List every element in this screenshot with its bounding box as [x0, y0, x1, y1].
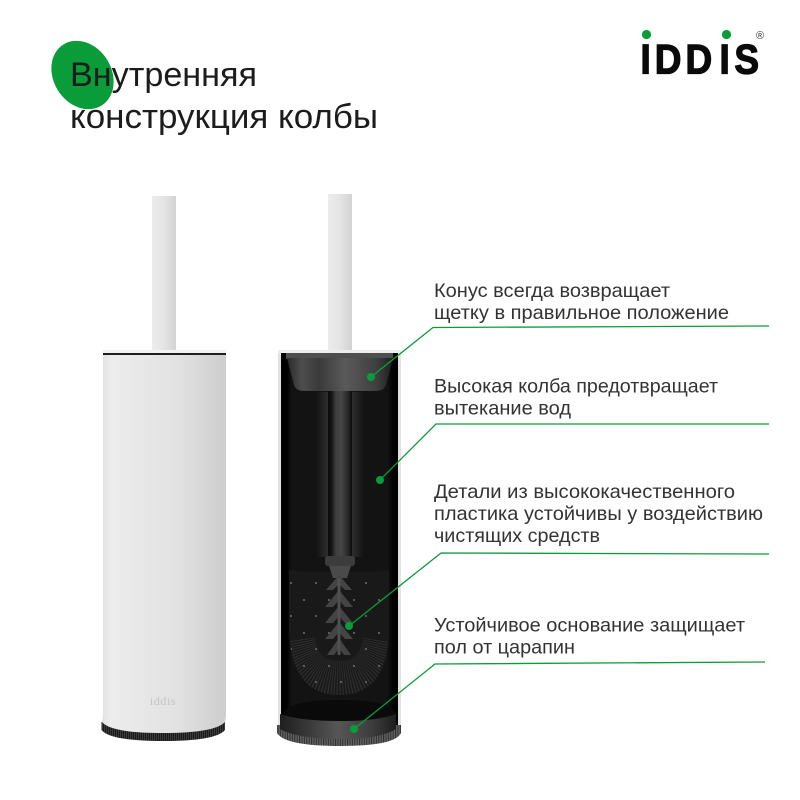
title: конструкция колбы [70, 98, 378, 136]
callout: tall flask [376, 376, 769, 484]
handle [328, 194, 352, 351]
base collar [280, 714, 396, 739]
logo: IDDIS: IDDIS [640, 36, 759, 83]
brush spine [325, 575, 353, 655]
callout: cone: Конус всегда возвращает [434, 280, 670, 302]
callout: stable base [350, 614, 765, 733]
product: cutaway view [277, 194, 401, 746]
callout: cone [367, 280, 769, 381]
base ring [102, 722, 225, 741]
cone [287, 358, 393, 391]
product: closed white brush holder [102, 196, 226, 741]
logo: IDDIS: ® [756, 30, 764, 42]
callout: tall flask: Высокая колба предотвращает [434, 376, 718, 398]
callout: stable base: Устойчивое основание защищает [434, 614, 745, 636]
callout: stable base: пол от царапин [434, 636, 575, 658]
callout: tall flask: вытекание вод [434, 398, 572, 420]
green title accent blob [39, 29, 126, 121]
handle [152, 196, 176, 351]
lid [103, 350, 226, 353]
cone top rim [286, 353, 393, 359]
title [70, 56, 378, 136]
title: Внутренняя [70, 56, 257, 94]
knurled base ring [277, 725, 401, 746]
lid [278, 350, 401, 353]
bristle fringe [298, 640, 380, 678]
base inner disc [283, 700, 396, 724]
callout: plastic parts: чистящих средств [434, 525, 600, 547]
brand mark: iddis [150, 694, 176, 708]
callout: plastic parts: Детали из высококачественного [434, 481, 735, 503]
brush head [289, 566, 389, 695]
top tuft [329, 566, 351, 578]
callout: cone: щетку в правильное положение [434, 302, 729, 324]
cylinder body [102, 350, 226, 733]
outer wall [278, 351, 401, 727]
callout: plastic parts [345, 481, 769, 630]
brush stem [328, 391, 352, 556]
soft reflections [316, 392, 364, 557]
callout: plastic parts: пластика устойчивы у воздействию [434, 503, 763, 525]
interior [281, 353, 398, 725]
lid gap line [103, 353, 226, 355]
stem collar [325, 556, 355, 566]
